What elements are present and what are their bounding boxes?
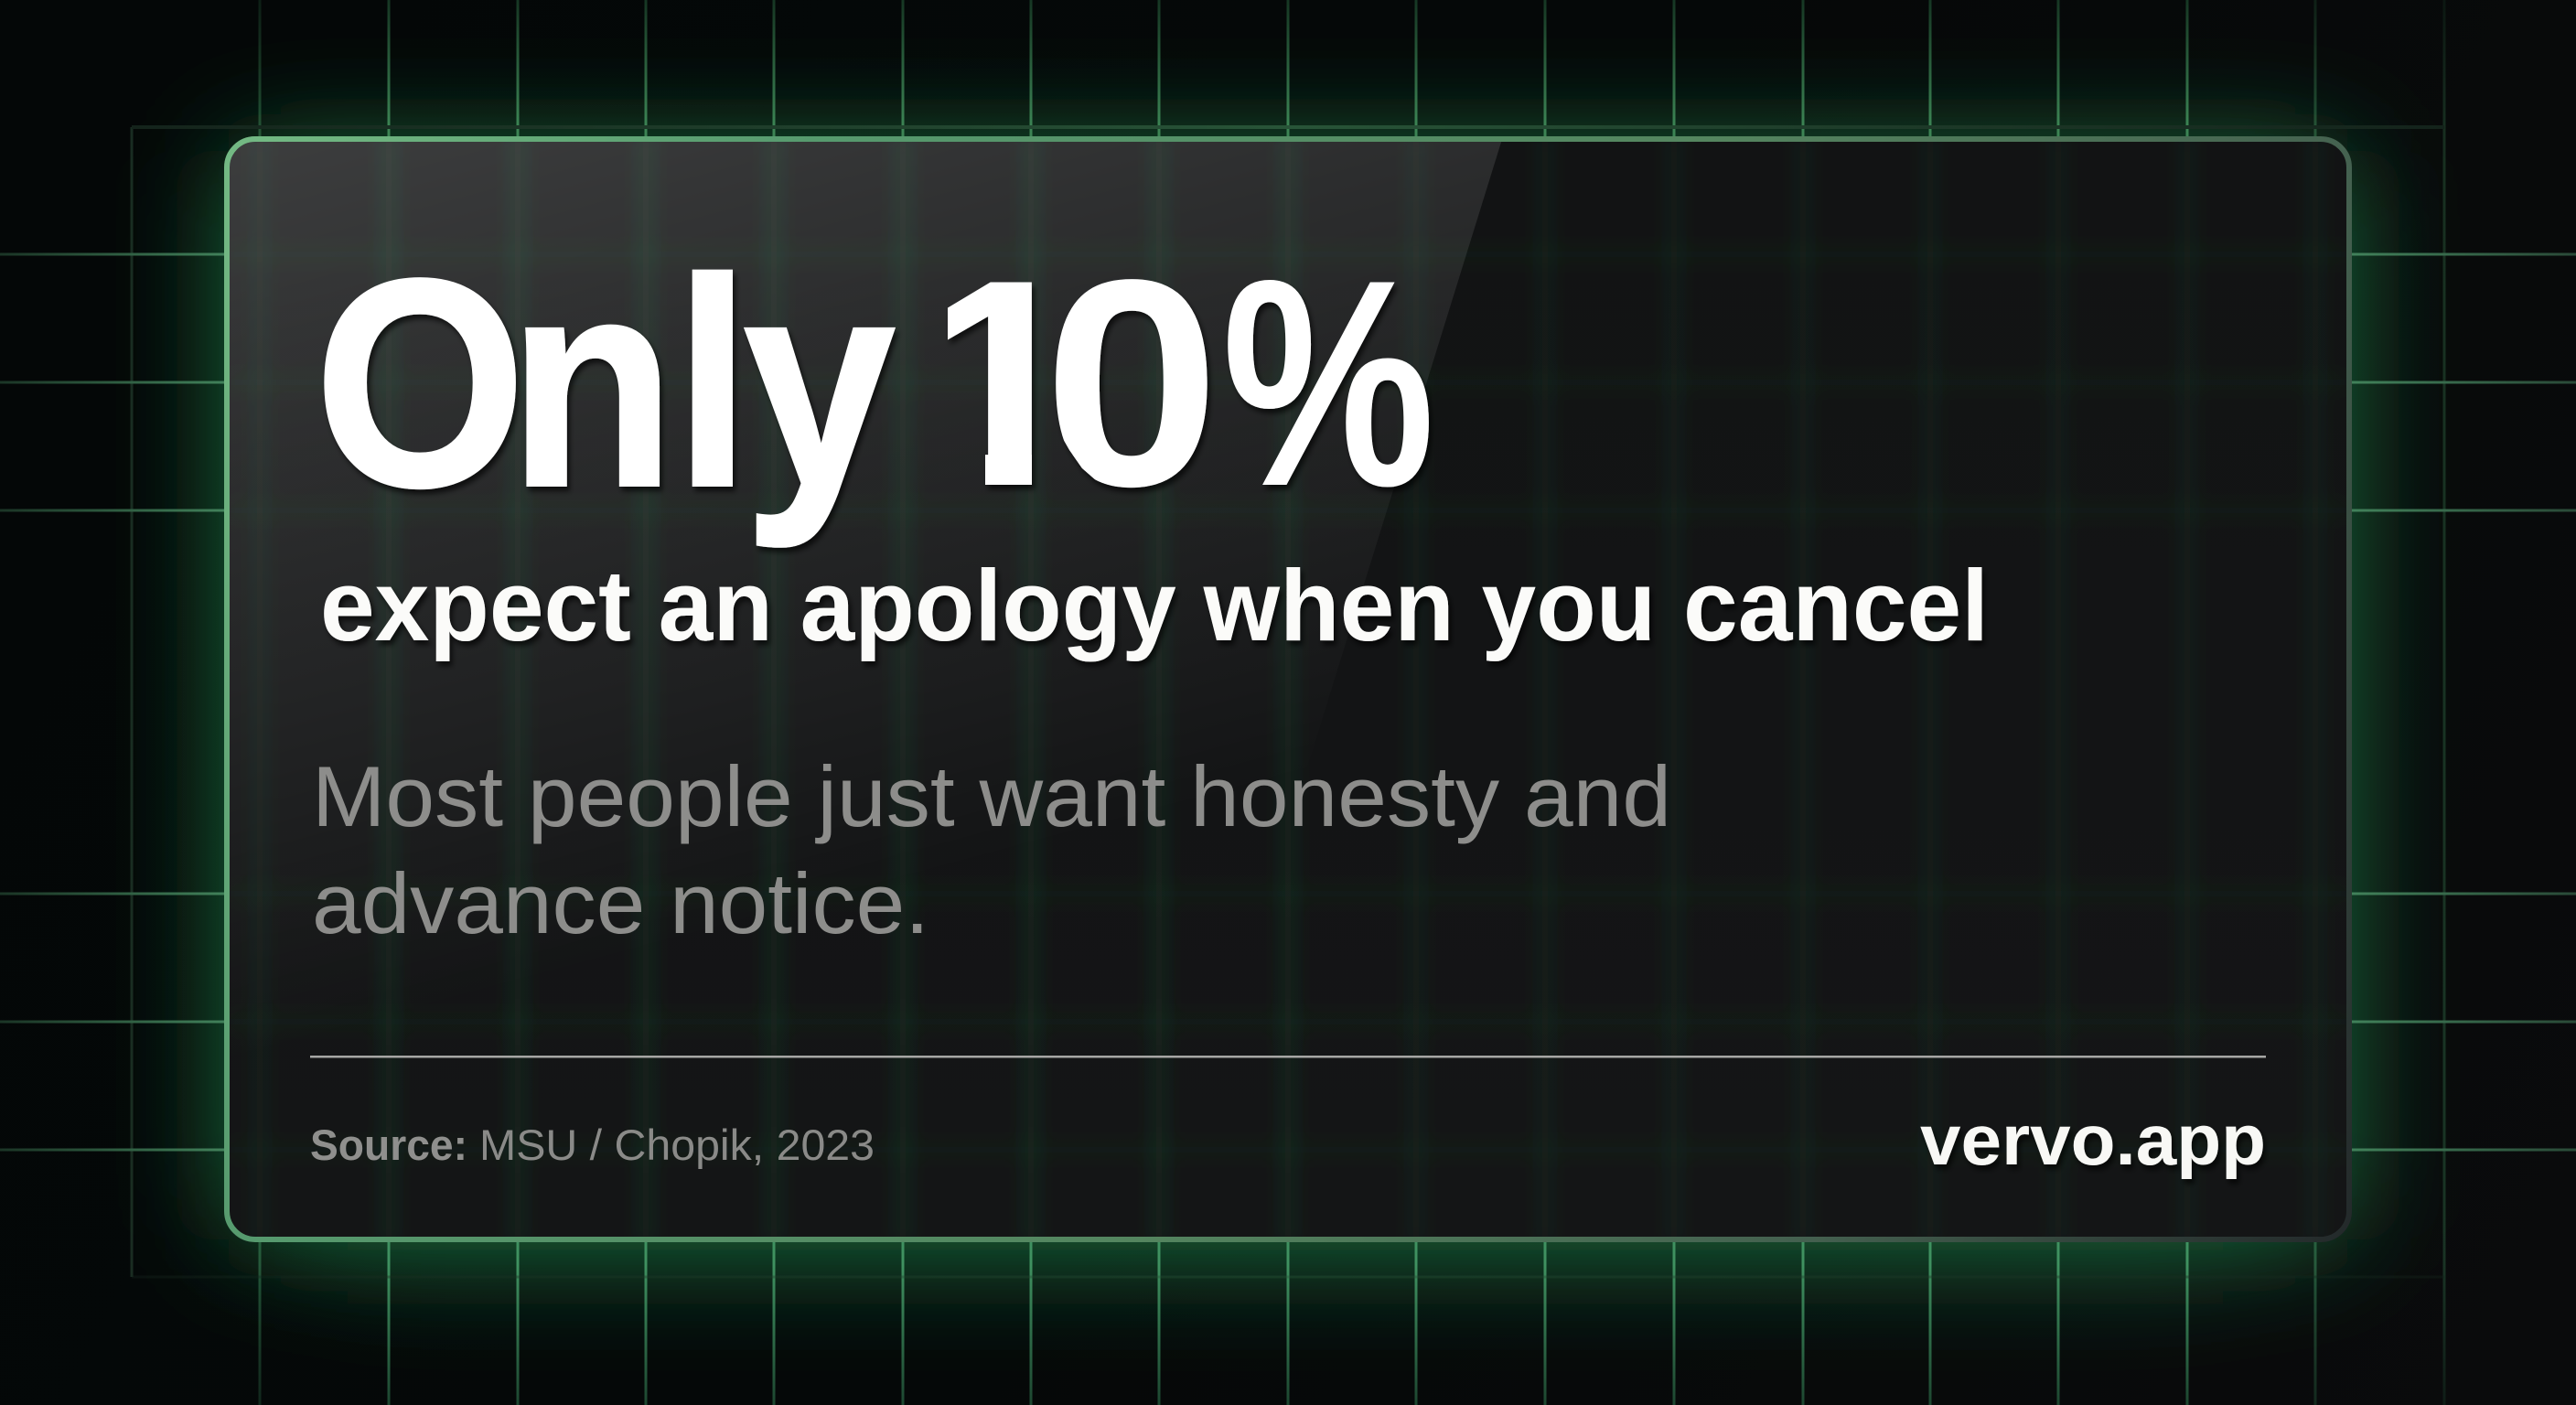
subheading: expect an apology when you cancel [320,550,1989,662]
headline: Only 10% [324,269,1431,554]
source line: Source: [310,1121,467,1169]
body text [312,748,1671,951]
headline: Only 10%: Only [315,219,896,549]
body text: Most people just want honesty and [312,748,1671,844]
green glow behind card [229,151,2347,1271]
source line [310,1121,875,1169]
divider [310,1056,2266,1057]
card base [224,136,2352,1242]
card border [227,139,2349,1239]
blurred grid seen through glass [224,136,2352,1242]
brand: vervo.app: vervo.app [1920,1099,2266,1180]
headline: Only 10%: % [1222,219,1435,548]
glass sheen [224,136,1501,880]
body text: advance notice. [312,855,929,951]
panel: glass card [224,136,2352,1242]
headline: Only 10%: 10 [914,220,1220,548]
source line: MSU / Chopik, 2023 [479,1121,875,1169]
